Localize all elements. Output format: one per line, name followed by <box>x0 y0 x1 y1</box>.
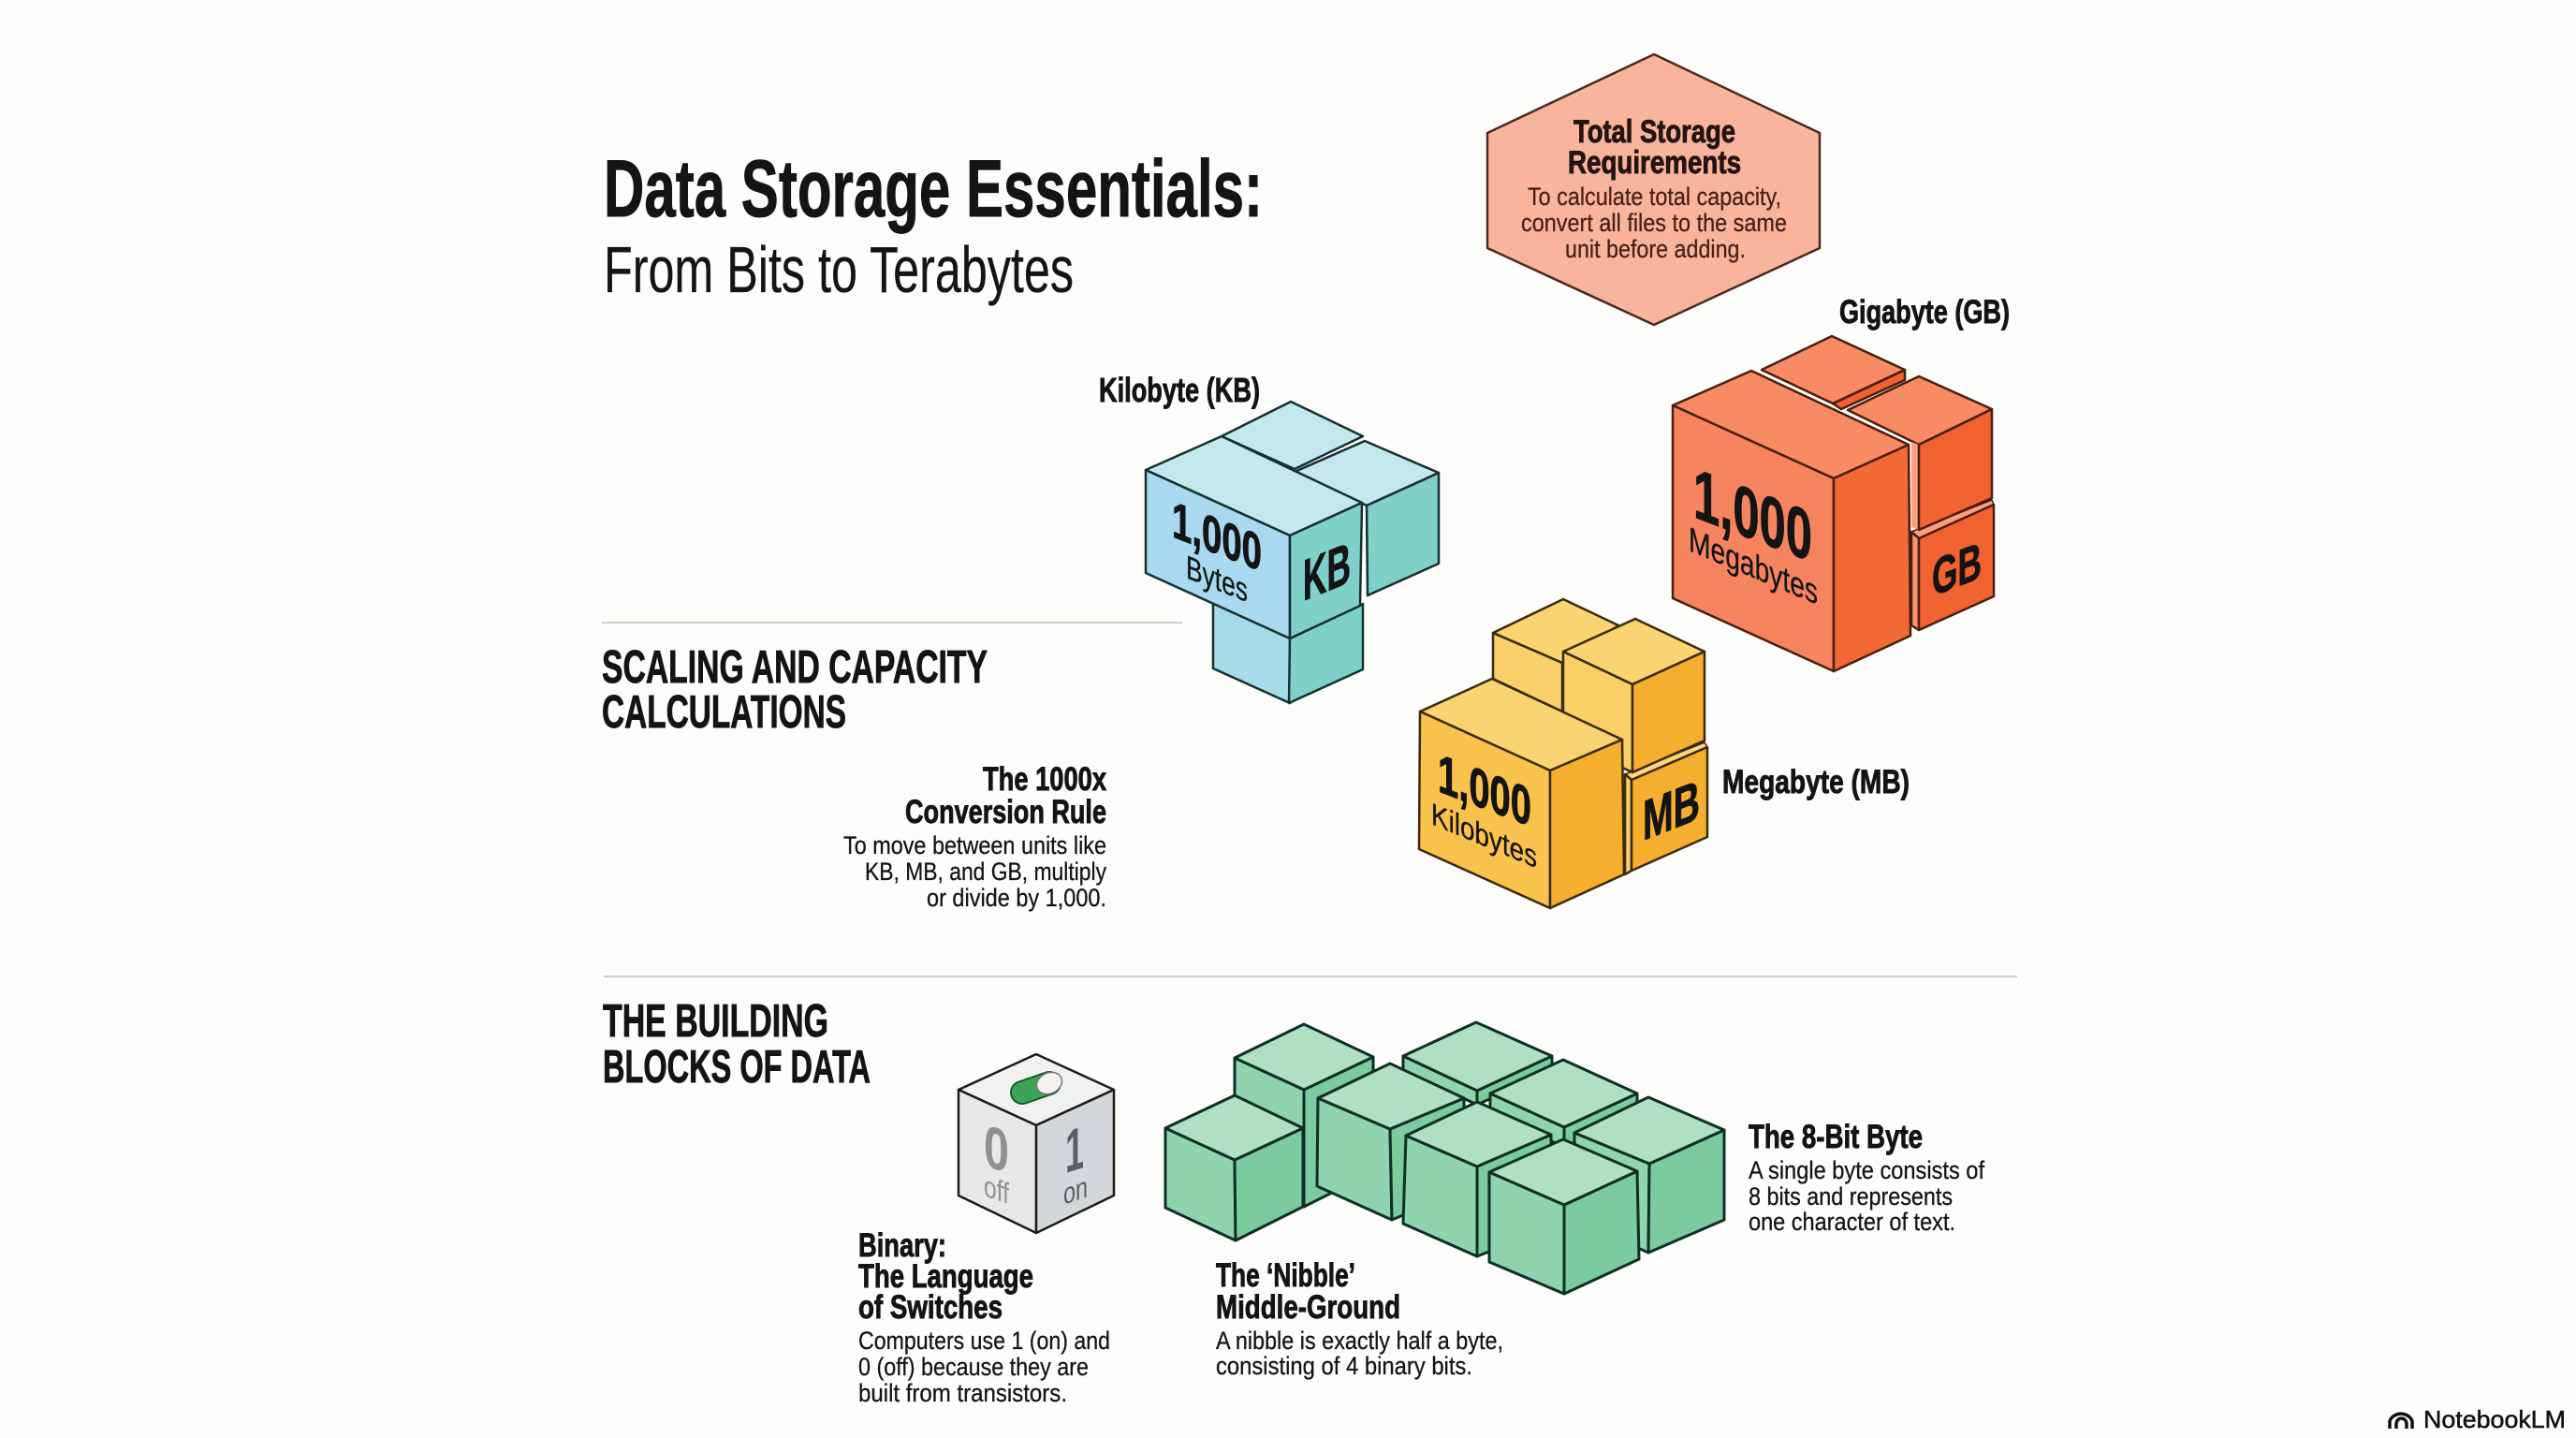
text block: the 8-bit byte: 8 bits and represents <box>1749 1182 1953 1211</box>
text block: binary: The Language <box>858 1258 1033 1295</box>
text block: binary: Computers use 1 (on) and <box>858 1327 1110 1355</box>
text block: the nibble: The ‘Nibble’ <box>1216 1257 1355 1294</box>
cube: front left <box>1165 1095 1303 1240</box>
text block: the nibble: A nibble is exactly half a byte, <box>1216 1327 1503 1355</box>
text: 1,000 bytes <box>1172 491 1351 613</box>
panel: total storage requirements hexagon: To calculate total capacity, <box>1528 183 1781 211</box>
logo: notebooklm: NotebookLM <box>2423 1405 2566 1433</box>
cube: center <box>1403 1102 1551 1256</box>
title: From Bits to Terabytes <box>604 233 1074 306</box>
text block: binary: built from transistors. <box>858 1379 1067 1407</box>
text block: binary: 0 (off) because they are <box>858 1353 1089 1381</box>
label: gigabyte: Gigabyte (GB) <box>1839 294 2010 330</box>
text block: the nibble <box>1216 1257 1503 1380</box>
text: 1,000 bytes: Bytes <box>1186 548 1248 609</box>
cube: front <box>1489 1139 1639 1294</box>
text block: the 1000x conversion rule: Conversion Rule <box>905 794 1106 830</box>
text block: the 8-bit byte: one character of text. <box>1749 1208 1955 1236</box>
panel: total storage requirements hexagon <box>1487 54 1820 325</box>
heading: scaling and capacity calculations <box>602 642 988 738</box>
text: 1,000 megabytes: Megabytes <box>1689 520 1818 613</box>
text block: binary: of Switches <box>858 1289 1003 1326</box>
text: 0 off and 1 on: 0 <box>984 1111 1009 1186</box>
text: 1,000 kilobytes: MB <box>1643 769 1700 853</box>
text: 1,000 megabytes: GB <box>1932 532 1982 609</box>
icon: toggle switch <box>1022 1068 1065 1098</box>
heading: scaling and capacity calculations: CALCULATIONS <box>602 687 846 738</box>
text block: the 8-bit byte <box>1749 1119 1984 1236</box>
panel: total storage requirements hexagon: Total Storage <box>1573 114 1735 150</box>
text block: binary <box>858 1227 1110 1407</box>
heading: the building blocks of data <box>603 996 871 1093</box>
text: 0 off and 1 on: 1 <box>1065 1113 1084 1186</box>
panel: total storage requirements hexagon: convert all files to the same <box>1521 209 1787 237</box>
heading: the building blocks of data: THE BUILDING <box>603 996 828 1047</box>
cube: back right <box>1490 1060 1637 1147</box>
text block: the 1000x conversion rule: or divide by 1,000. <box>927 884 1106 912</box>
label: kilobyte: Kilobyte (KB) <box>1099 371 1260 409</box>
text: 0 off and 1 on: off <box>984 1168 1010 1211</box>
cube: right <box>1574 1097 1724 1253</box>
icon: gigabyte orange cubes <box>1673 336 1994 671</box>
heading: scaling and capacity calculations: SCALING AND CAPACITY <box>602 642 988 693</box>
icon: notebooklm arcs <box>2390 1414 2412 1429</box>
panel: total storage requirements hexagon: Requirements <box>1568 145 1741 181</box>
cube: back middle <box>1403 1022 1552 1105</box>
icon: kilobyte blue cubes <box>1146 402 1439 703</box>
title <box>604 144 1263 306</box>
label: megabyte: Megabyte (MB) <box>1722 764 1910 800</box>
text block: the 1000x conversion rule: KB, MB, and GB, multiply <box>865 858 1106 886</box>
text: 0 off and 1 on: on <box>1063 1169 1088 1211</box>
icon: megabyte yellow cubes <box>1419 599 1707 908</box>
text block: the 1000x conversion rule: The 1000x <box>983 761 1106 798</box>
cube: back left <box>1235 1024 1373 1207</box>
title: Data Storage Essentials: <box>604 144 1263 234</box>
heading: the building blocks of data: BLOCKS OF DATA <box>603 1042 871 1093</box>
text: 1,000 kilobytes: 1,000 <box>1438 742 1531 839</box>
text: 1,000 kilobytes <box>1431 742 1700 875</box>
text: 0 off and 1 on <box>984 1111 1088 1211</box>
text block: the 8-bit byte: The 8-Bit Byte <box>1749 1119 1923 1155</box>
text block: the nibble: consisting of 4 binary bits. <box>1216 1352 1472 1380</box>
panel: total storage requirements hexagon: unit before adding. <box>1565 235 1746 263</box>
text block: the nibble: Middle-Ground <box>1216 1289 1400 1326</box>
cube: middle left <box>1317 1064 1464 1220</box>
text: 1,000 bytes: 1,000 <box>1172 491 1262 583</box>
text block: the 8-bit byte: A single byte consists of <box>1749 1156 1984 1184</box>
text: 1,000 megabytes <box>1689 452 1982 613</box>
text: 1,000 kilobytes: Kilobytes <box>1431 797 1537 875</box>
text: 1,000 bytes: KB <box>1303 530 1351 613</box>
text: 1,000 megabytes: 1,000 <box>1693 452 1812 578</box>
icon: binary switch cube <box>959 1054 1114 1233</box>
icon: green byte cubes <box>1165 1022 1724 1294</box>
text block: binary: Binary: <box>858 1227 946 1264</box>
text block: the 1000x conversion rule: To move between units like <box>843 831 1106 859</box>
text block: the 1000x conversion rule <box>843 761 1106 912</box>
